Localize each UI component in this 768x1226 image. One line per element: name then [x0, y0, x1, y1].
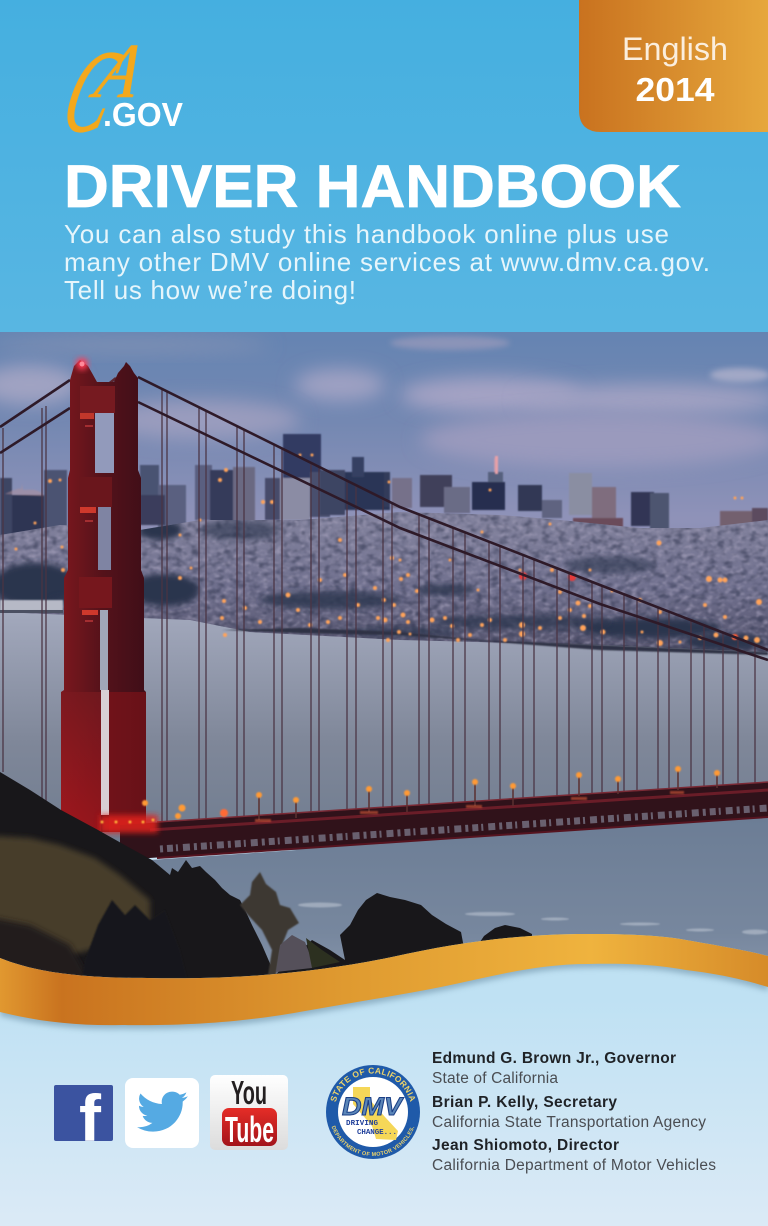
icon: YouTube: Tube	[225, 1109, 274, 1150]
footer background	[0, 934, 768, 1226]
water of the bay	[0, 610, 768, 850]
officials list: Edmund G. Brown Jr., Governor	[432, 1050, 676, 1067]
state of California shape	[353, 1087, 398, 1140]
CA.GOV logo	[50, 27, 183, 157]
intro text	[64, 219, 710, 305]
language and year tab: 2014	[636, 71, 715, 108]
surf foam on the water	[298, 902, 768, 934]
header panel	[0, 0, 768, 332]
bridge main cables	[0, 377, 768, 660]
city lights	[14, 454, 762, 646]
dark hillside and trees	[0, 766, 532, 1000]
California DMV seal	[326, 1065, 420, 1159]
DMV lettering: DMV	[342, 1093, 405, 1121]
CA.GOV logo: .GOV	[103, 96, 183, 133]
bridge suspender cables	[3, 389, 755, 822]
seal ring text: DEPARTMENT OF MOTOR VEHICLES.	[332, 1126, 414, 1156]
icon: YouTube	[210, 1074, 288, 1150]
intro text: Tell us how we’re doing!	[64, 275, 356, 305]
officials list: Brian P. Kelly, Secretary	[432, 1094, 617, 1111]
title: DRIVER HANDBOOK	[64, 153, 681, 220]
officials list: Jean Shiomoto, Director	[432, 1137, 619, 1154]
warning lights on the main cable	[495, 456, 738, 640]
city hillside	[0, 505, 768, 655]
language and year tab	[579, 0, 768, 132]
Driving Change slogan: CHANGE...	[357, 1129, 397, 1137]
social media icons	[54, 1074, 288, 1155]
officials list: California State Transportation Agency	[432, 1114, 706, 1131]
icon: Facebook	[54, 1085, 113, 1141]
Golden Gate tower	[61, 358, 146, 832]
seal ring text	[330, 1068, 416, 1156]
San Francisco skyline buildings	[0, 434, 768, 538]
intro text: many other DMV online services at www.dmv.ca.gov.	[64, 247, 710, 277]
sky with clouds	[0, 332, 768, 632]
photo: Golden Gate Bridge and San Francisco at dusk	[0, 332, 768, 1010]
seal ring text: STATE OF CALIFORNIA	[330, 1068, 416, 1102]
bridge deck and truss	[120, 782, 768, 860]
Driving Change slogan: DRIVING	[346, 1120, 378, 1128]
icon: YouTube: You	[231, 1074, 267, 1111]
water beyond the bridge deck	[150, 818, 768, 1010]
Driving Change slogan	[346, 1120, 397, 1137]
intro text: You can also study this handbook online plus use	[64, 219, 669, 249]
CA.GOV logo: C	[50, 27, 133, 157]
piers and shoreline	[0, 600, 768, 655]
officials list: State of California	[432, 1070, 558, 1087]
officials list: California Department of Motor Vehicles	[432, 1157, 716, 1174]
bridge street lamps	[100, 766, 720, 833]
CA.GOV logo: A	[82, 29, 155, 115]
icon: Facebook: f	[79, 1081, 102, 1155]
language and year tab: English	[622, 31, 728, 67]
officials list	[432, 1050, 716, 1174]
icon: Twitter	[125, 1078, 199, 1148]
gold ribbon wave	[0, 934, 768, 1029]
